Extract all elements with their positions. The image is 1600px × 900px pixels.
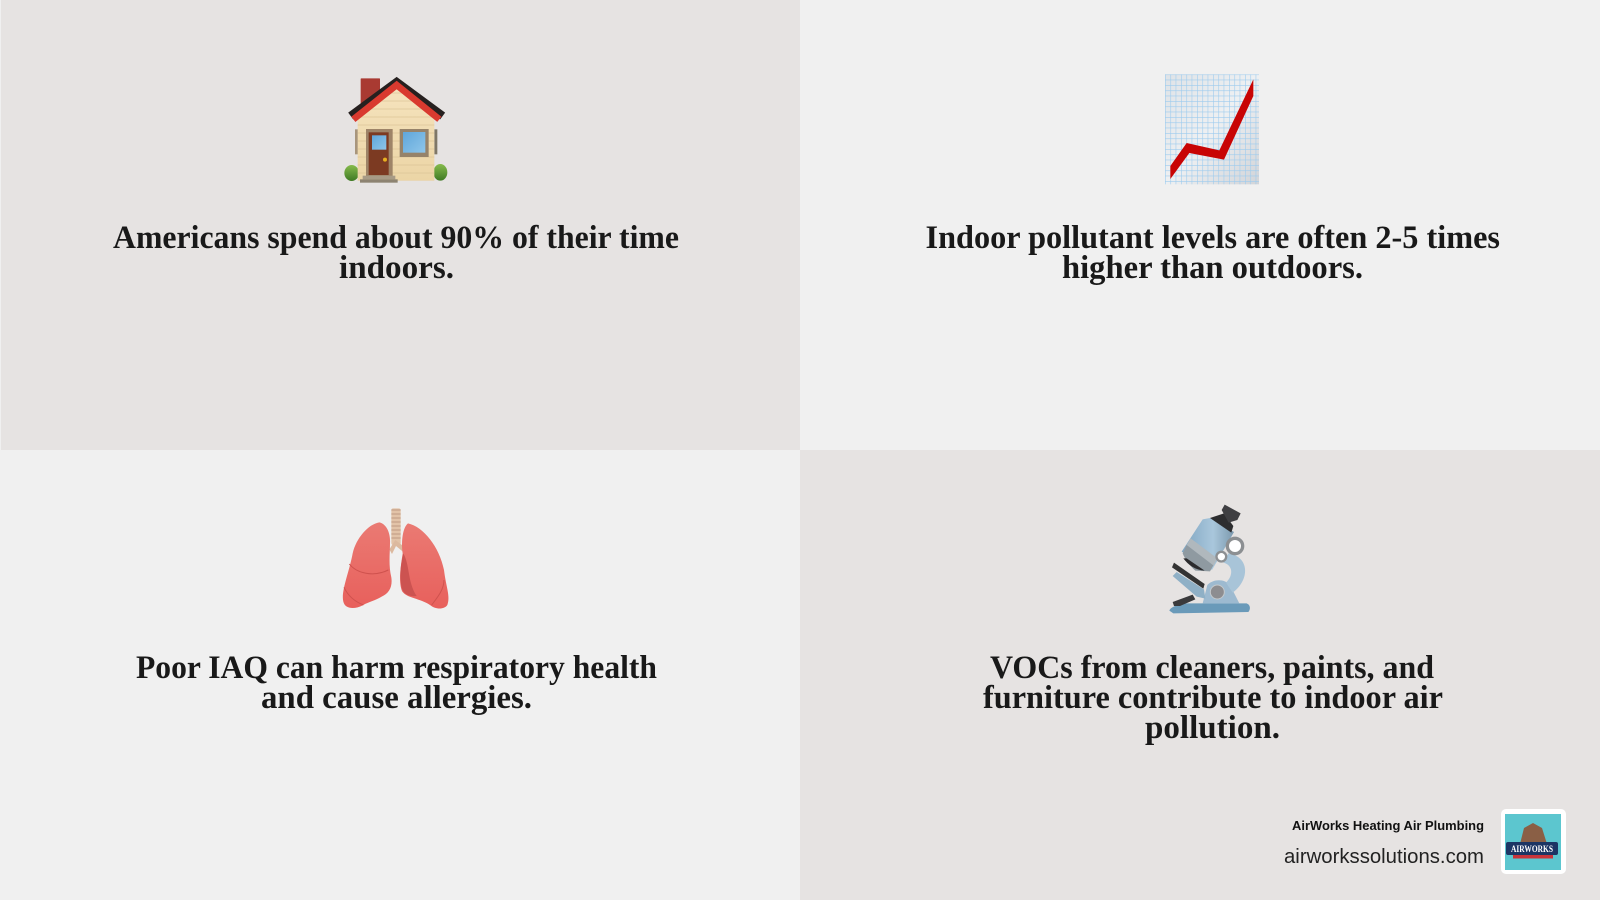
heading: respiratory health [136, 650, 657, 716]
icon: lungs [343, 508, 448, 609]
heading: VOCs: pollution. [1145, 710, 1280, 746]
panel: time indoors [1, 0, 800, 450]
logo: AIRWORKS [1511, 844, 1553, 854]
heading: pollutant levels [926, 220, 1500, 286]
website: airworkssolutions.com [1284, 846, 1484, 868]
brand name: AirWorks Heating Air Plumbing [1292, 818, 1484, 833]
heading: VOCs: VOCs from cleaners, paints, and [990, 650, 1434, 686]
heading: pollutant levels: Indoor pollutant levels are often 2-5 times [926, 220, 1500, 256]
heading: respiratory health: and cause allergies. [261, 680, 532, 716]
heading: respiratory health: Poor IAQ can harm respiratory health [136, 650, 657, 686]
panel: respiratory health [0, 450, 800, 900]
heading: pollutant levels: higher than outdoors. [1062, 250, 1363, 286]
icon: house [344, 78, 447, 183]
heading: time indoors: indoors. [339, 250, 454, 286]
heading: time indoors: Americans spend about 90% of their time [113, 220, 679, 256]
heading: VOCs [983, 650, 1443, 746]
icon: chart increasing [1165, 74, 1259, 184]
heading: VOCs: furniture contribute to indoor air [983, 680, 1443, 716]
heading: time indoors [113, 220, 679, 286]
panel: pollutant levels [800, 0, 1600, 450]
icon: microscope [1169, 505, 1250, 613]
panel: VOCs [800, 450, 1600, 900]
logo [1501, 809, 1566, 874]
